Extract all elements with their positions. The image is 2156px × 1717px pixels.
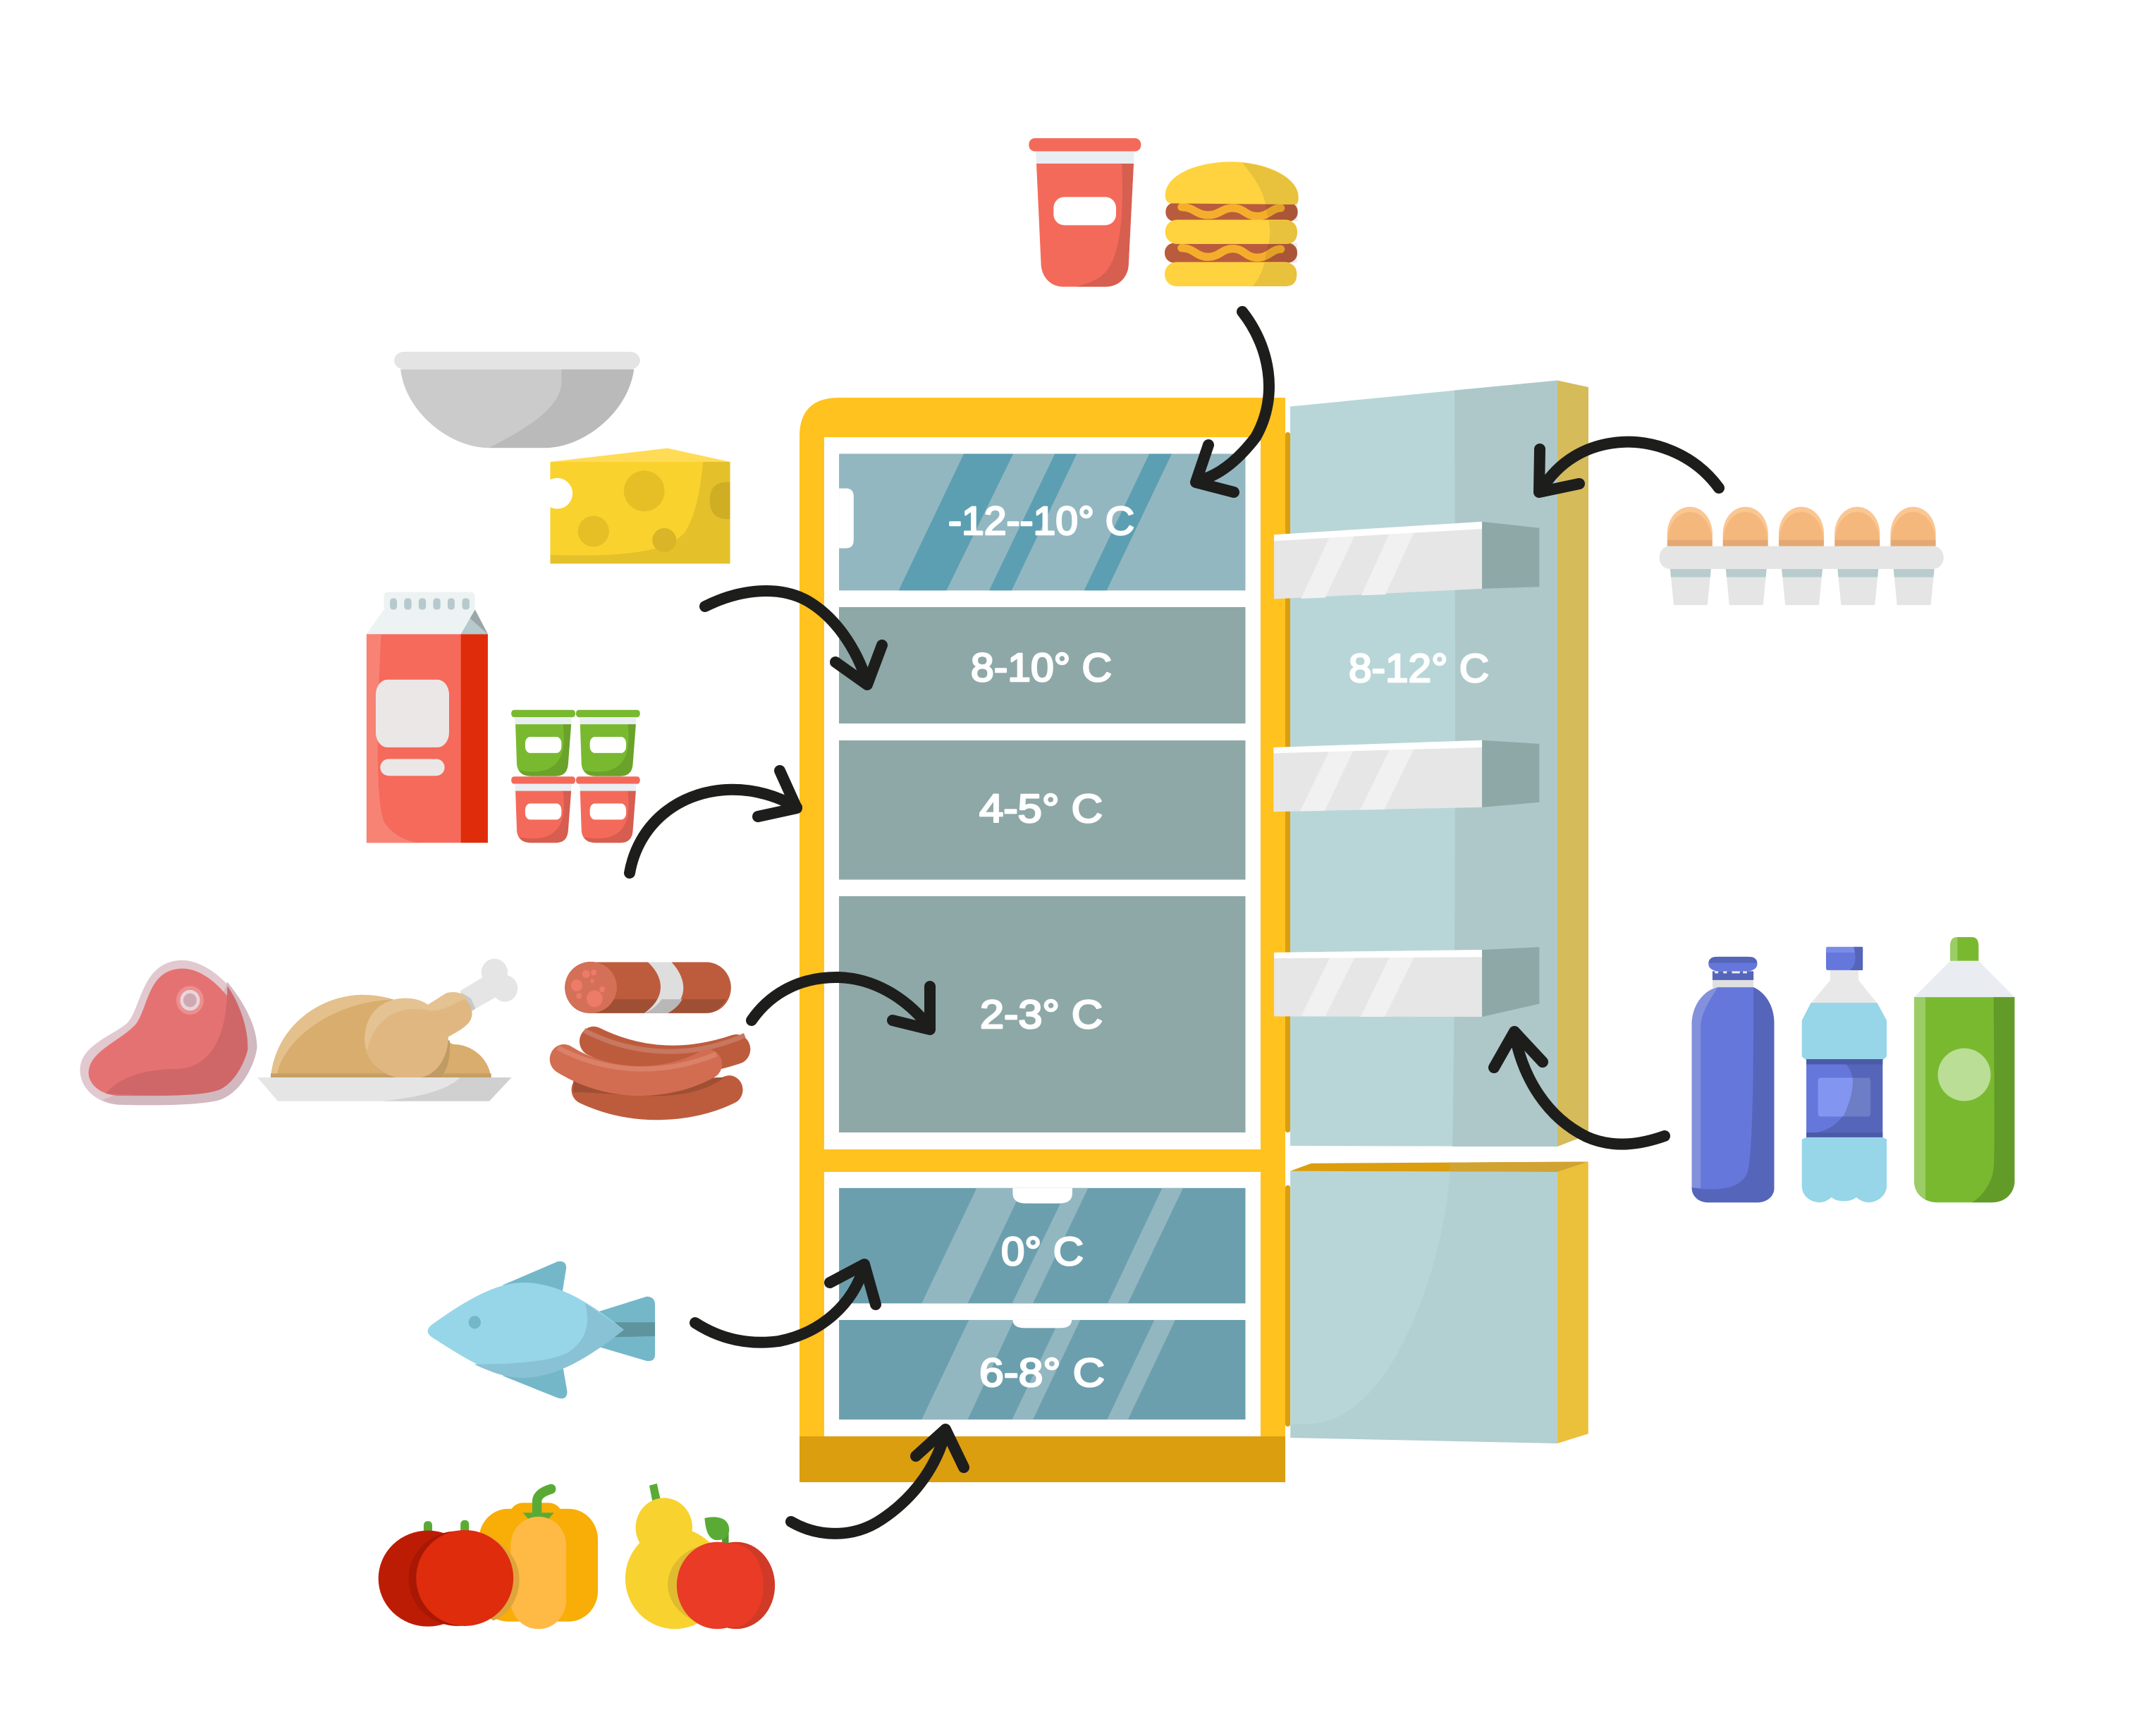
panel: vegetable drawer [839,1320,1245,1419]
icon: yogurt pots [511,710,640,843]
temperature labels: 0° C [1001,1229,1084,1274]
icon: green bottle [1914,937,2014,1202]
icon: roast chicken [257,959,517,1101]
icon: meat steak [80,960,257,1105]
panel: upper shelf [839,607,1245,723]
icon: yogurt cup [1029,138,1141,287]
icon: blue jar bottle [1692,957,1774,1202]
icon: burger [1165,161,1299,286]
arrow: produce to vegetable drawer [791,1429,964,1534]
arrow: bottles to door [1494,1032,1665,1144]
icon: egg tray [1660,507,1944,605]
panel: lower door [1290,1162,1588,1443]
panel: middle shelf [839,740,1245,880]
temperature labels: 2-3° C [980,992,1103,1037]
icon: bell pepper [479,1489,598,1629]
panel: lower shelf [839,896,1245,1132]
icon: bowl [394,352,640,448]
panel: freezer compartment [839,454,1245,590]
temperature labels: 8-12° C [1349,646,1489,691]
arrow: meat to lower shelf [752,977,930,1029]
temperature labels: 4-5° C [979,786,1103,831]
fridge body [800,398,1285,1482]
arrow: cheese to upper shelf [705,591,882,685]
icon: sausages [558,962,745,1106]
panel: chiller drawer [839,1188,1245,1303]
door shelves [1273,522,1539,1017]
arrow: dairy to middle shelf [630,771,797,873]
icon: pear and apple [625,1484,775,1629]
icon: milk carton [367,592,488,843]
hinges [1285,432,1290,1426]
icon: tomatoes [379,1520,520,1627]
icon: water bottle [1802,947,1887,1202]
temperature labels: 8-10° C [971,645,1112,690]
temperature labels: 6-8° C [979,1350,1105,1395]
arrow: fish to chiller drawer [695,1264,876,1343]
icon: fish [428,1261,655,1398]
arrow: eggs to door [1539,442,1719,492]
panel: upper door [1290,381,1588,1147]
arrow: burger and yogurt to freezer [1196,312,1269,492]
temperature labels: -12--10° C [948,499,1134,544]
icon: cheese [542,448,730,563]
temperature labels [948,499,1489,1395]
